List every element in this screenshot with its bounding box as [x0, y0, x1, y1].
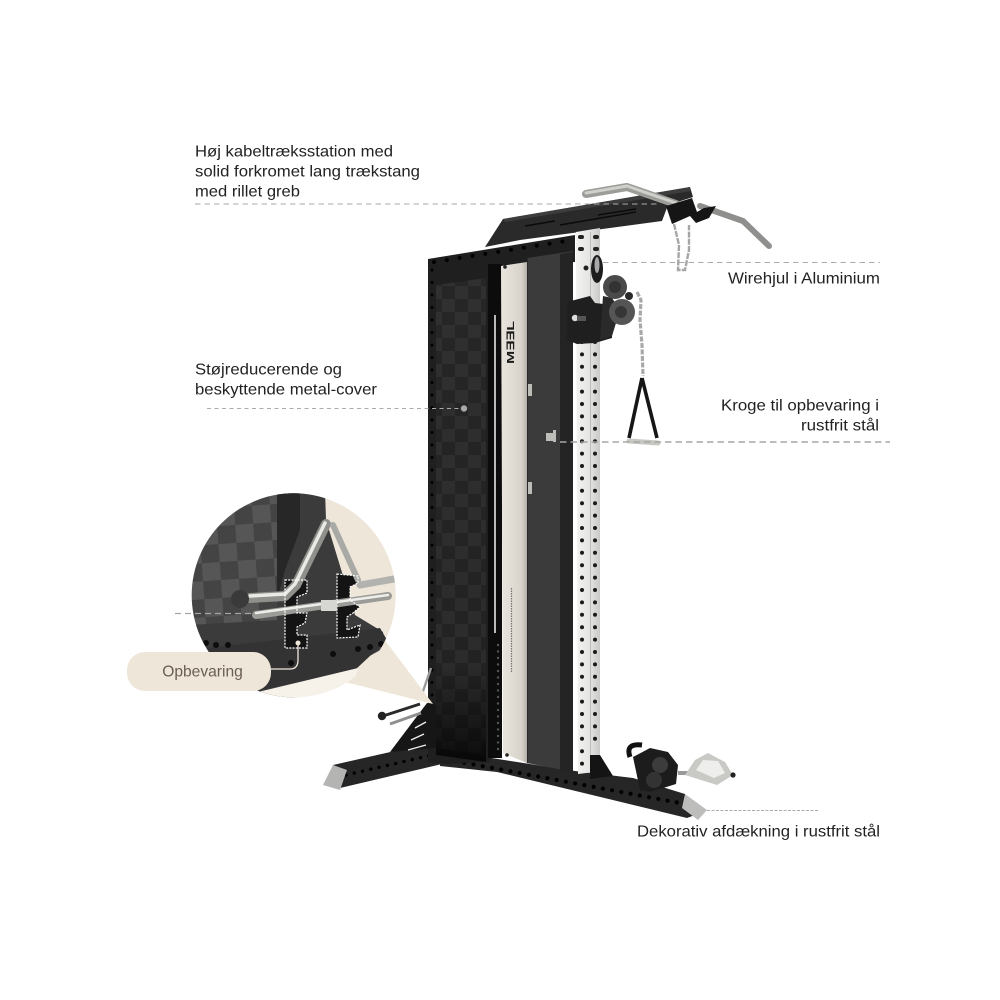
column foot gusset — [590, 755, 613, 779]
lens bottom plate — [190, 628, 387, 690]
text: metal cover line 2: beskyttende metal-cover — [195, 382, 377, 398]
lens perforated panel — [190, 490, 278, 660]
lens ball knob — [231, 590, 249, 608]
leader line: metal cover — [207, 408, 462, 410]
callout cone — [345, 635, 433, 704]
callout leader — [270, 644, 298, 669]
lens holes — [203, 640, 384, 666]
beige panel: M∃∃L — [506, 321, 517, 364]
text: pull station line 2: solid forkromet lang trækstang — [195, 164, 420, 180]
text: hooks line 2: rustfrit stål — [801, 416, 879, 434]
beige panel — [501, 262, 527, 763]
pulley carriage — [567, 275, 635, 344]
lens background — [190, 490, 400, 700]
leader line: hooks — [560, 441, 890, 443]
zoom lens: storage detail — [190, 490, 400, 700]
lens right hook fill — [337, 574, 360, 638]
machine: cable station — [323, 186, 769, 820]
leader line: steel cap — [707, 810, 818, 812]
callout pill: Opbevaring: Opbevaring — [162, 664, 243, 680]
leader dot: metal cover — [461, 405, 467, 412]
lens chrome coupling — [321, 600, 337, 611]
lens left hook fill — [285, 580, 307, 648]
white steel column — [576, 228, 600, 774]
callout leader dot — [296, 640, 300, 646]
left foot beam — [333, 743, 442, 788]
top arm — [485, 187, 693, 247]
decorative steel cap left — [323, 765, 347, 790]
dark centre panel — [527, 251, 573, 772]
leader line: lens — [175, 612, 252, 614]
leader line: wire pulley — [603, 262, 880, 264]
black hooks on pull bar — [666, 198, 716, 224]
lens left hook outline — [285, 580, 307, 648]
lens chrome triangle handle — [250, 523, 394, 615]
cable channel — [488, 264, 502, 758]
icon: wire pulley top — [591, 255, 603, 283]
base beam right — [440, 750, 695, 818]
text: pull station line 3: med rillet greb — [195, 184, 300, 200]
chain and triangle handle — [629, 292, 658, 443]
decorative steel cap right — [682, 794, 707, 820]
storage hooks on centre panel — [528, 384, 556, 494]
hanging chains — [674, 224, 689, 270]
text: hooks: Kroge til opbevaring i — [721, 398, 879, 414]
long chrome pull bar — [586, 186, 769, 246]
text: wire pulley: Wirehjul i Aluminium — [728, 270, 880, 288]
leader line: pull bar — [195, 203, 660, 205]
left storage gusset and bars — [378, 668, 436, 752]
lower pulley block and handle — [629, 745, 736, 792]
lens right hook outline — [337, 574, 360, 638]
text: pull station: Høj kabeltræksstation med — [195, 144, 393, 160]
rear metal cover panel — [428, 235, 575, 764]
callout pill: Opbevaring — [127, 652, 271, 691]
lens dark post — [190, 490, 384, 700]
text: metal cover: Støjreducerende og — [195, 362, 342, 378]
text: steel cap: Dekorativ afdækning i rustfrit stål — [637, 822, 880, 840]
